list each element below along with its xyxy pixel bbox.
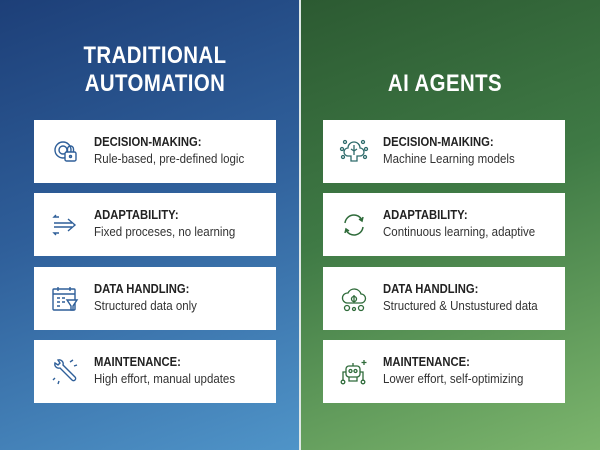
- title: traditional automation: AUTOMATION: [85, 70, 225, 97]
- card: maintenance traditional: High effort, manual updates: [94, 372, 235, 386]
- card: maintenance traditional: MAINTENANCE:: [94, 355, 181, 369]
- card: data handling AI: Structured & Unstustured data: [383, 299, 538, 313]
- card: decision-making AI: DECISION-MAIKING:: [383, 135, 494, 149]
- icon: gear lock: [54, 141, 77, 162]
- card: decision-making traditional: Rule-based, pre-defined logic: [94, 152, 244, 166]
- icon: wrench: [52, 359, 78, 384]
- title: traditional automation: [84, 42, 226, 97]
- title: traditional automation: TRADITIONAL: [84, 42, 226, 69]
- card: decision-making AI: [323, 120, 565, 183]
- card: decision-making AI: Machine Learning models: [383, 152, 515, 166]
- icon: cycle arrows: [344, 214, 364, 236]
- card: maintenance AI: [323, 340, 565, 403]
- card: adaptability traditional: ADAPTABILITY:: [94, 208, 179, 222]
- card: data handling traditional: Structured data only: [94, 299, 197, 313]
- card: decision-making traditional: [34, 120, 276, 183]
- icon: cloud data: [342, 288, 366, 312]
- card: maintenance AI: MAINTENANCE:: [383, 355, 470, 369]
- panel: AI agents background: [301, 0, 600, 450]
- card: maintenance traditional: [34, 340, 276, 403]
- card: adaptability AI: ADAPTABILITY:: [383, 208, 468, 222]
- panel: traditional automation background: [0, 0, 299, 450]
- icon: robot: [340, 360, 366, 384]
- card: data handling AI: [323, 267, 565, 330]
- card: adaptability traditional: [34, 193, 276, 256]
- card: data handling traditional: [34, 267, 276, 330]
- card: decision-making traditional: DECISION-MAKING:: [94, 135, 202, 149]
- card: data handling traditional: DATA HANDLING:: [94, 282, 189, 296]
- card: adaptability traditional: Fixed proceses, no learning: [94, 225, 235, 239]
- icon: arrows: [52, 214, 76, 236]
- card: data handling AI: DATA HANDLING:: [383, 282, 478, 296]
- title: AI agents: AI AGENTS: [388, 70, 502, 97]
- icon: calendar filter: [52, 287, 78, 311]
- card: adaptability AI: [323, 193, 565, 256]
- card: maintenance AI: Lower effort, self-optimizing: [383, 372, 523, 386]
- card: adaptability AI: Continuous learning, adaptive: [383, 225, 535, 239]
- icon: brain network: [340, 140, 368, 162]
